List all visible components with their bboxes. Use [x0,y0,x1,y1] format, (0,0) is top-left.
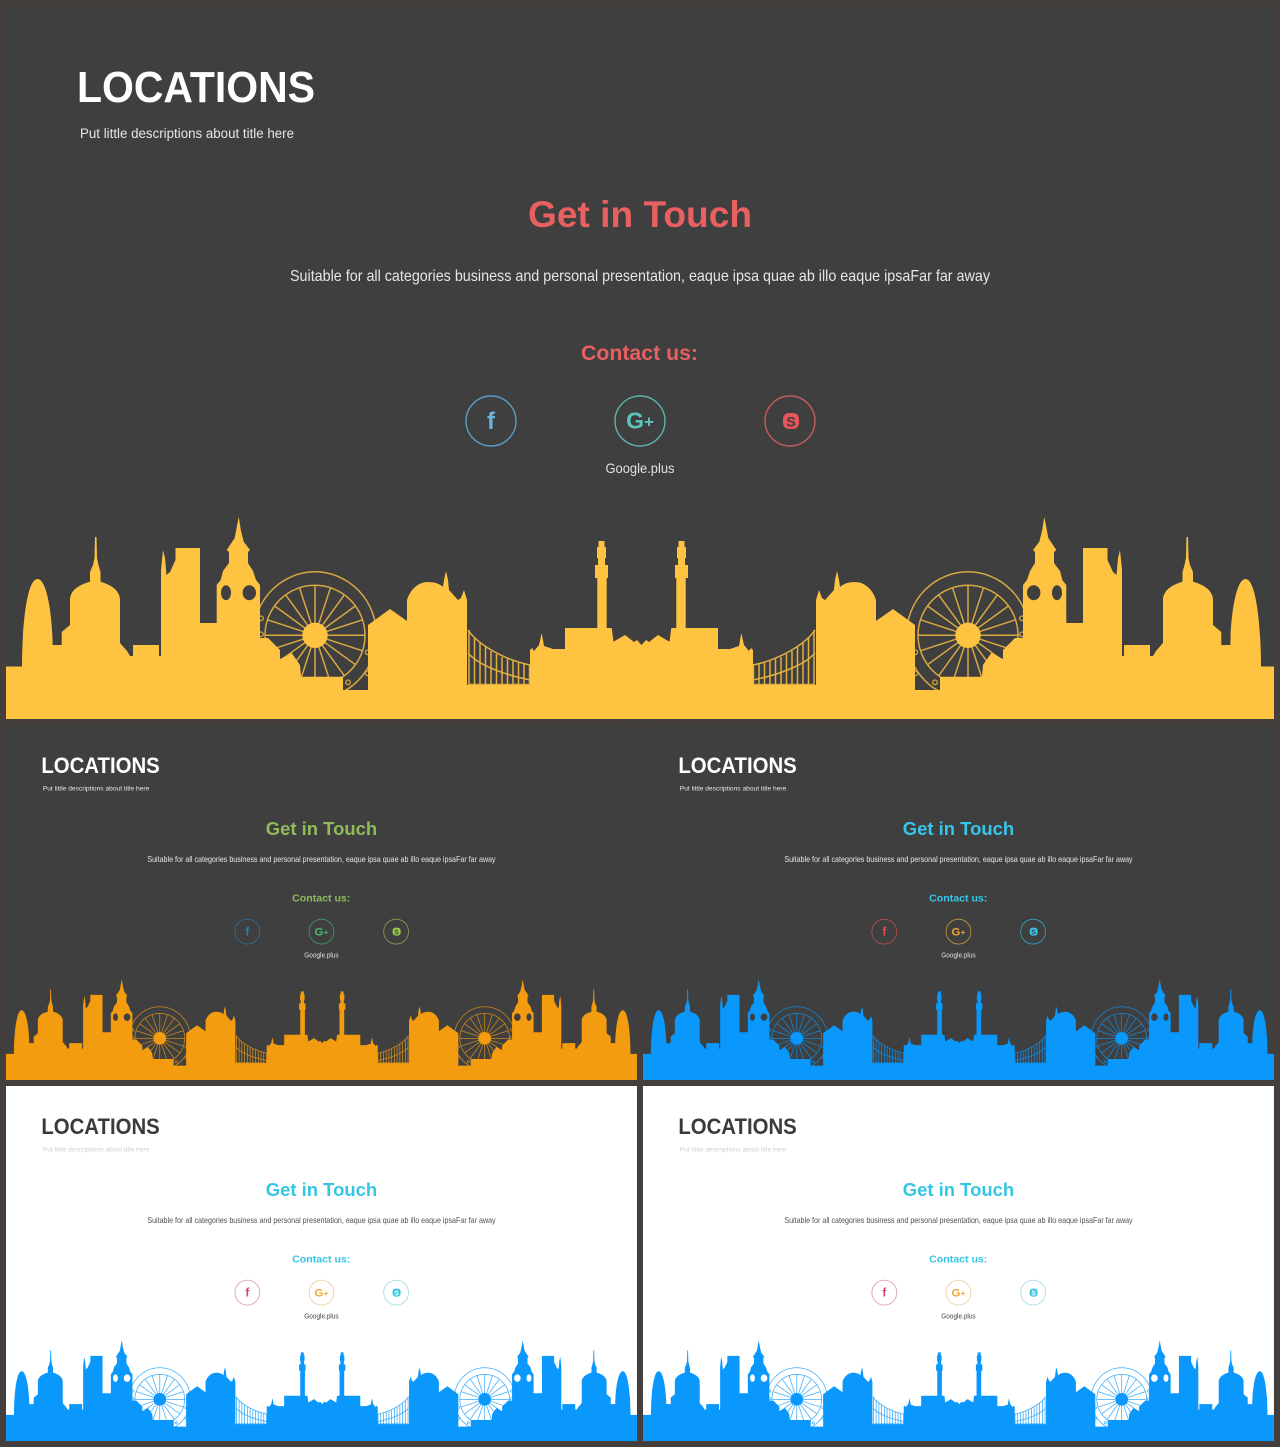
icon: facebook [235,919,260,944]
contact label: Google.plus [304,1314,339,1321]
icon: google plus [946,919,971,944]
heading: contact us: Contact us: [929,1254,987,1265]
skyline: blue [643,1340,1275,1441]
icon: google plus: + [960,927,965,937]
subtitle: Put little descriptions about title here [680,786,787,793]
heading: get in touch: Get in Touch [903,818,1014,839]
title: LOCATIONS [678,753,797,778]
heading: get in touch: Get in Touch [266,818,377,839]
icon: facebook: f [245,1286,249,1300]
icon: google plus: G [315,926,323,938]
icon: skype: S [394,1290,399,1297]
title: LOCATIONS [678,1114,797,1139]
description: Suitable for all categories business and personal presentation, eaque ipsa quae ab illo eaque ipsaFar far away [147,855,496,864]
subtitle: Put little descriptions about title here [43,786,150,793]
icon: facebook: f [882,1286,886,1300]
description: Suitable for all categories business and personal presentation, eaque ipsa quae ab illo eaque ipsaFar far away [784,855,1133,864]
heading: get in touch: Get in Touch [528,194,752,235]
icon: google plus [309,1280,334,1305]
description: Suitable for all categories business and personal presentation, eaque ipsa quae ab illo eaque ipsaFar far away [784,1216,1133,1225]
icon: google plus: G [952,1287,960,1299]
subtitle: Put little descriptions about title here [80,126,294,141]
heading: contact us: Contact us: [292,1254,350,1265]
icon: google plus [615,396,665,446]
skyline: orange [6,979,638,1080]
icon: skype [1021,919,1046,944]
heading: get in touch: Get in Touch [903,1179,1014,1200]
icon: skype [384,1280,409,1305]
icon: facebook [235,1280,260,1305]
panel: dark slide with blue skyline [643,725,1275,1080]
panel: white slide right with blue skyline [643,1086,1275,1441]
panel: main dark slide with yellow skyline [6,6,1277,719]
icon: skype: S [394,929,399,936]
icon: facebook: f [882,925,886,939]
skyline: blue [6,1340,638,1441]
subtitle: Put little descriptions about title here [680,1147,787,1154]
icon: skype [1021,1280,1046,1305]
contact label: Google.plus [941,953,976,960]
contact label: Google.plus [304,953,339,960]
title: LOCATIONS [77,63,315,112]
heading: contact us: Contact us: [292,893,350,904]
panel: dark slide with orange skyline [6,725,638,1080]
icon: google plus: G [626,408,644,434]
icon: google plus: G [315,1287,323,1299]
icon: skype [765,396,815,446]
skyline: yellow [6,517,1277,719]
icon: google plus [309,919,334,944]
icon: google plus [946,1280,971,1305]
description: Suitable for all categories business and personal presentation, eaque ipsa quae ab illo eaque ipsaFar far away [290,268,990,285]
icon: skype: S [1031,929,1036,936]
title: LOCATIONS [41,1114,160,1139]
description: Suitable for all categories business and personal presentation, eaque ipsa quae ab illo eaque ipsaFar far away [147,1216,496,1225]
contact label: Google.plus [941,1314,976,1321]
panel: white slide left with blue skyline [6,1086,638,1441]
icon: google plus: + [644,412,654,432]
icon: skype [384,919,409,944]
heading: contact us: Contact us: [929,893,987,904]
icon: facebook: f [487,408,496,435]
icon: facebook [872,919,897,944]
contact label: Google.plus [606,460,674,476]
icon: google plus: G [952,926,960,938]
heading: contact us: Contact us: [581,342,698,365]
skyline: blue [643,979,1275,1080]
icon: facebook: f [245,925,249,939]
icon: google plus: + [323,927,328,937]
subtitle: Put little descriptions about title here [43,1147,150,1154]
title: LOCATIONS [41,753,160,778]
icon: skype: S [786,414,796,430]
icon: skype: S [1031,1290,1036,1297]
icon: google plus: + [960,1288,965,1298]
icon: google plus: + [323,1288,328,1298]
icon: facebook [466,396,516,446]
heading: get in touch: Get in Touch [266,1179,377,1200]
icon: facebook [872,1280,897,1305]
